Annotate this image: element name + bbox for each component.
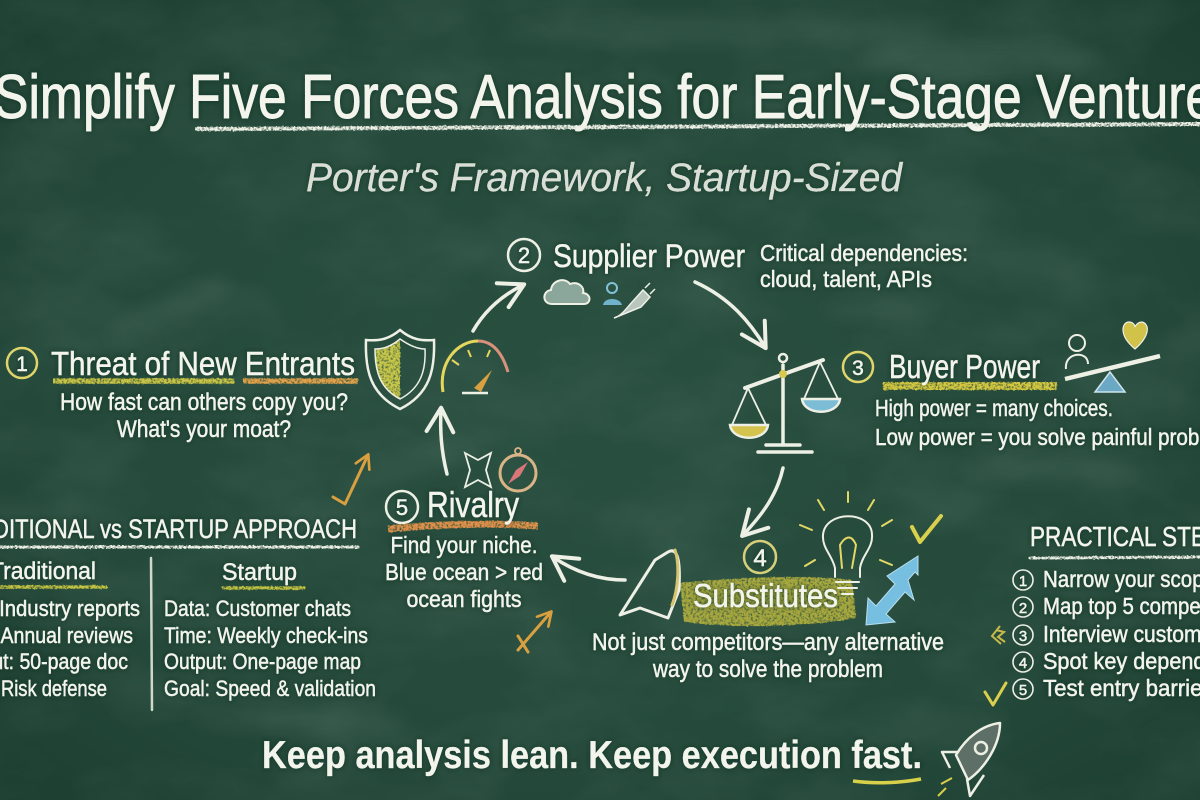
force 5: rivalry: ocean fights — [406, 586, 522, 612]
icon: blue double arrow — [866, 556, 918, 625]
icon: crossed shapes and compass — [465, 448, 536, 491]
panel: traditional vs startup approach: Data: Customer chats — [164, 596, 351, 621]
arrow: supplier power to buyer power — [695, 282, 765, 347]
force 1: threat of new entrants: Threat of New Entrants — [51, 345, 355, 382]
yellow check beside steps — [985, 683, 1006, 705]
force 2: supplier power — [508, 238, 968, 292]
force 5: rivalry: Find your niche. — [390, 532, 538, 558]
force 5: rivalry — [385, 484, 543, 612]
small orange arrow — [518, 612, 551, 652]
arrow: new entrants to supplier power — [473, 285, 523, 331]
icon: paper sail — [620, 550, 679, 618]
arrow: substitutes to rivalry — [553, 557, 625, 580]
arrow: buyer power to substitutes — [743, 468, 783, 535]
force 3: buyer power: Buyer Power — [889, 348, 1040, 385]
icon: seesaw with person and heart — [1065, 322, 1160, 392]
force 1: threat of new entrants — [7, 345, 358, 443]
panel: traditional vs startup approach: Goal: Speed & validation — [164, 676, 376, 701]
footer takeaway: Keep analysis lean. Keep execution fast. — [262, 734, 922, 777]
icon: light bulb — [800, 492, 892, 594]
force 4: substitutes: 4 — [753, 545, 767, 572]
icon: balance scales — [730, 354, 840, 452]
panel: traditional vs startup approach: Startup — [222, 559, 297, 586]
force 2: supplier power: 2 — [518, 243, 530, 268]
icon: yellow check mark — [912, 516, 941, 542]
panel: traditional vs startup approach: Time: Weekly check-ins — [164, 623, 368, 648]
force 2: supplier power: Critical dependencies: — [760, 240, 968, 266]
force 3: buyer power: High power = many choices. — [875, 395, 1113, 421]
icon: rocket — [938, 723, 1000, 796]
force 5: rivalry: 5 — [396, 495, 408, 520]
force 4: substitutes: way to solve the problem — [652, 656, 883, 683]
panel: practical steps: 4 — [1019, 655, 1027, 672]
panel: practical steps: 5 — [1019, 682, 1027, 699]
force 1: threat of new entrants: What's your moat? — [117, 416, 291, 443]
force 1: threat of new entrants: How fast can others copy you? — [60, 389, 348, 416]
force 3: buyer power — [843, 348, 1200, 450]
subtitle: Porter's Framework, Startup-Sized — [306, 156, 904, 200]
force 1: threat of new entrants: 1 — [16, 353, 28, 376]
force 5: rivalry: Rivalry — [427, 484, 519, 525]
panel: practical steps: 2 — [1019, 600, 1027, 617]
icon: cloud, person and plug — [544, 280, 655, 318]
icon: shield — [366, 330, 434, 409]
panel: practical steps — [1013, 521, 1200, 701]
icon: speedometer gauge — [442, 341, 508, 393]
force 4: substitutes: Not just competitors—any alternative — [592, 629, 944, 656]
force 2: supplier power: Supplier Power — [553, 238, 745, 274]
force 4: substitutes — [592, 541, 944, 683]
force 2: supplier power: cloud, talent, APIs — [760, 266, 932, 292]
force 5: rivalry: Blue ocean > red — [385, 559, 543, 585]
panel: traditional vs startup approach — [0, 514, 376, 710]
small scribble mark — [992, 626, 1005, 644]
force 3: buyer power: 3 — [852, 357, 864, 380]
small orange arrow with check — [333, 455, 368, 504]
force 4: substitutes: Substitutes — [693, 577, 838, 614]
panel: traditional vs startup approach: Output: One-page map — [164, 649, 361, 674]
panel: practical steps: 1 — [1019, 573, 1027, 590]
arrow: rivalry to new entrants — [441, 409, 447, 474]
panel: practical steps: 3 — [1019, 628, 1027, 645]
